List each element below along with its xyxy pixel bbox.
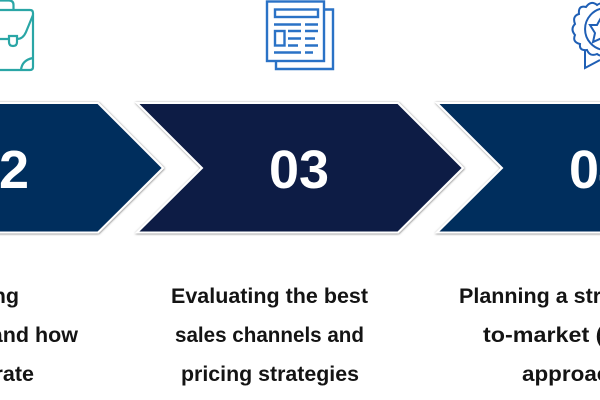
number 03: 03 <box>269 140 329 200</box>
text: step 03: pricing strategies <box>181 362 359 386</box>
icon: briefcase <box>0 0 33 70</box>
text: step 03: sales channels and <box>175 323 364 347</box>
arrow 04 <box>437 103 600 232</box>
icon: newspaper pages <box>267 2 333 69</box>
icon: award rosette <box>572 3 600 68</box>
text: step 03: Evaluating the best <box>171 284 368 308</box>
text: step 02 <box>0 284 78 386</box>
arrow 02 <box>0 103 163 232</box>
text: step 04 <box>459 284 600 386</box>
arrow 03 <box>137 103 463 232</box>
text: step 03 <box>171 284 368 386</box>
